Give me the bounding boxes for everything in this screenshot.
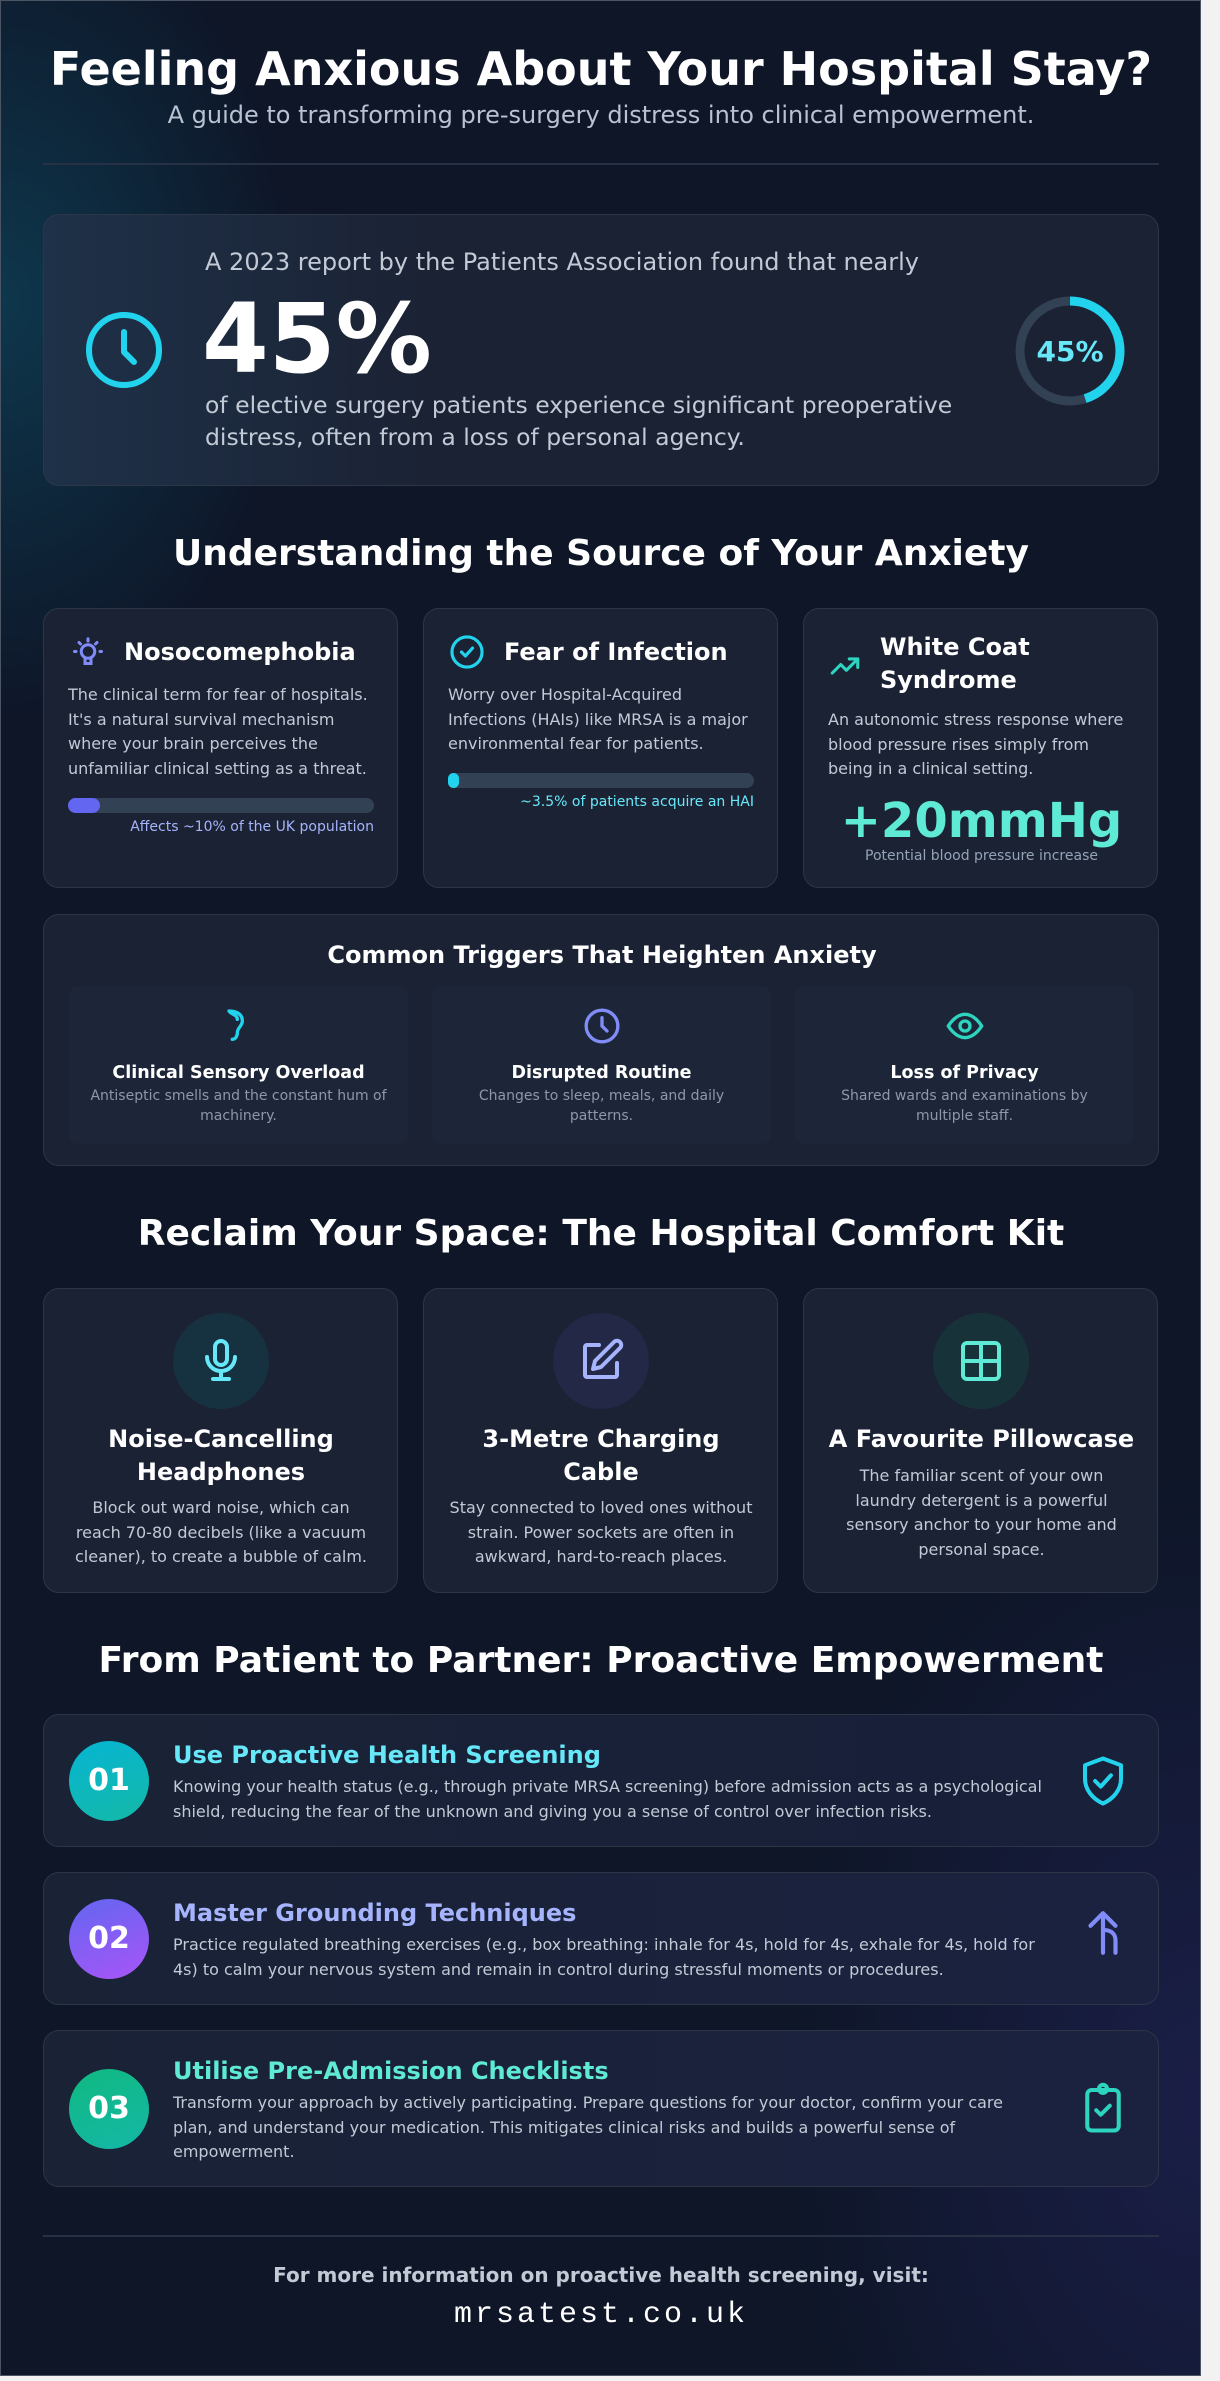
panel: white coat: [803, 608, 1158, 888]
card text: Worry over Hospital-Acquired Infections (HAIs) like MRSA is a major environmental fear for patients.: [448, 685, 748, 753]
bar: 10%: [68, 798, 374, 813]
icon: mic: [173, 1313, 269, 1409]
trigger title: Disrupted Routine: [511, 1063, 692, 1083]
footer link: mrsatest.co.uk: [454, 2298, 748, 2332]
icon: clock: [86, 312, 162, 388]
text: description: of elective surgery patients experience significant preoperative distress, often from a loss of personal agency.: [205, 391, 952, 451]
panel: headphones: [43, 1288, 398, 1593]
heading: comfort kit: Reclaim Your Space: The Hospital Comfort Kit: [138, 1213, 1064, 1254]
trigger text: Changes to sleep, meals, and daily patterns.: [479, 1088, 724, 1124]
icon: clipboard: [1085, 2082, 1121, 2132]
trigger: privacy: [795, 986, 1134, 1144]
card title: Nosocomephobia: [124, 638, 356, 666]
heading: empowerment: From Patient to Partner: Proactive Empowerment: [98, 1640, 1104, 1681]
icon: arrow up: [1088, 1911, 1118, 1955]
step 01: [43, 1714, 1159, 1847]
trigger: sensory: [69, 986, 408, 1144]
panel: pillowcase: [803, 1288, 1158, 1593]
card text: The familiar scent of your own laundry detergent is a powerful sensory anchor to your home and personal space.: [846, 1466, 1117, 1558]
card title: Noise-Cancelling Headphones: [108, 1425, 334, 1486]
panel: nosocomephobia: [43, 608, 398, 888]
icon: bulb: [73, 637, 103, 665]
panel: fear of infection: [423, 608, 778, 888]
card text: An autonomic stress response where blood pressure rises simply from being in a clinical setting.: [828, 710, 1123, 778]
panel: triggers: [43, 914, 1159, 1166]
icon: trend: [830, 657, 860, 675]
trigger text: Shared wards and examinations by multiple staff.: [841, 1088, 1088, 1124]
step text: Practice regulated breathing exercises (e.g., box breathing: inhale for 4s, hold for 4s, exhale for 4s, hold for 4s) to calm your nervous system and remain in control during stressful moments or procedures.: [173, 1935, 1035, 1978]
icon: check circle: [450, 635, 484, 669]
panel title: Common Triggers That Heighten Anxiety: [327, 941, 877, 969]
card text: The clinical term for fear of hospitals. It's a natural survival mechanism where your brain perceives the unfamiliar clinical setting as a threat.: [68, 685, 368, 778]
bar: 3.5%: [448, 773, 754, 788]
chart: ring 45%: [1016, 296, 1124, 406]
step title: Use Proactive Health Screening: [173, 1741, 601, 1769]
icon: square plus: [933, 1313, 1029, 1409]
card text: Stay connected to loved ones without strain. Power sockets are often in awkward, hard-to-reach places.: [450, 1498, 752, 1566]
card title: A Favourite Pillowcase: [829, 1425, 1134, 1453]
trigger text: Antiseptic smells and the constant hum of machinery.: [90, 1088, 387, 1124]
icon: edit: [553, 1313, 649, 1409]
text: intro: A 2023 report by the Patients Association found that nearly: [205, 248, 919, 276]
footer text: For more information on proactive health screening, visit:: [273, 2263, 929, 2287]
trigger title: Loss of Privacy: [890, 1063, 1039, 1083]
card title: 3-Metre Charging Cable: [482, 1425, 720, 1486]
stat: 45%: 45%: [202, 283, 432, 395]
card title: White Coat Syndrome: [880, 633, 1030, 694]
heading: understanding: Understanding the Source of Your Anxiety: [173, 533, 1029, 574]
number badge: 03: [88, 2091, 130, 2126]
step title: Master Grounding Techniques: [173, 1899, 576, 1927]
number badge: 02: [88, 1921, 130, 1956]
card text: Block out ward noise, which can reach 70-80 decibels (like a vacuum cleaner), to create a bubble of calm.: [75, 1498, 367, 1566]
chart: ring 45%: 45%: [1036, 335, 1104, 368]
trigger: routine: [432, 986, 771, 1144]
trigger title: Clinical Sensory Overload: [112, 1063, 365, 1083]
step text: Transform your approach by actively participating. Prepare questions for your doctor, confirm your care plan, and understand your medication. This mitigates clinical risks and builds a powerful sense of empowerment.: [173, 2093, 1003, 2161]
number badge: [69, 1899, 149, 1979]
number badge: [69, 2069, 149, 2149]
icon: eye: [946, 1012, 984, 1040]
number badge: 01: [88, 1763, 130, 1798]
step 02: [43, 1872, 1159, 2005]
card title: Fear of Infection: [504, 638, 728, 666]
panel: stat card: [43, 214, 1159, 486]
stat: +20mmHg: +20mmHg: [841, 793, 1122, 849]
title: Feeling Anxious About Your Hospital Stay?: [50, 42, 1152, 96]
step title: Utilise Pre-Admission Checklists: [173, 2057, 609, 2085]
bar label: ~3.5% of patients acquire an HAI: [520, 794, 754, 810]
panel: cable: [423, 1288, 778, 1593]
icon: shield: [1082, 1756, 1124, 1806]
subtitle: A guide to transforming pre-surgery distress into clinical empowerment.: [168, 101, 1034, 129]
step 03: [43, 2030, 1159, 2187]
step text: Knowing your health status (e.g., through private MRSA screening) before admission acts as a psychological shield, reducing the fear of the unknown and giving you a sense of control over infection risks.: [173, 1777, 1042, 1820]
icon: clock: [584, 1008, 620, 1044]
stat label: Potential blood pressure increase: [865, 848, 1098, 864]
number badge: [69, 1741, 149, 1821]
bar label: Affects ~10% of the UK population: [130, 819, 374, 835]
icon: ear: [227, 1009, 244, 1041]
